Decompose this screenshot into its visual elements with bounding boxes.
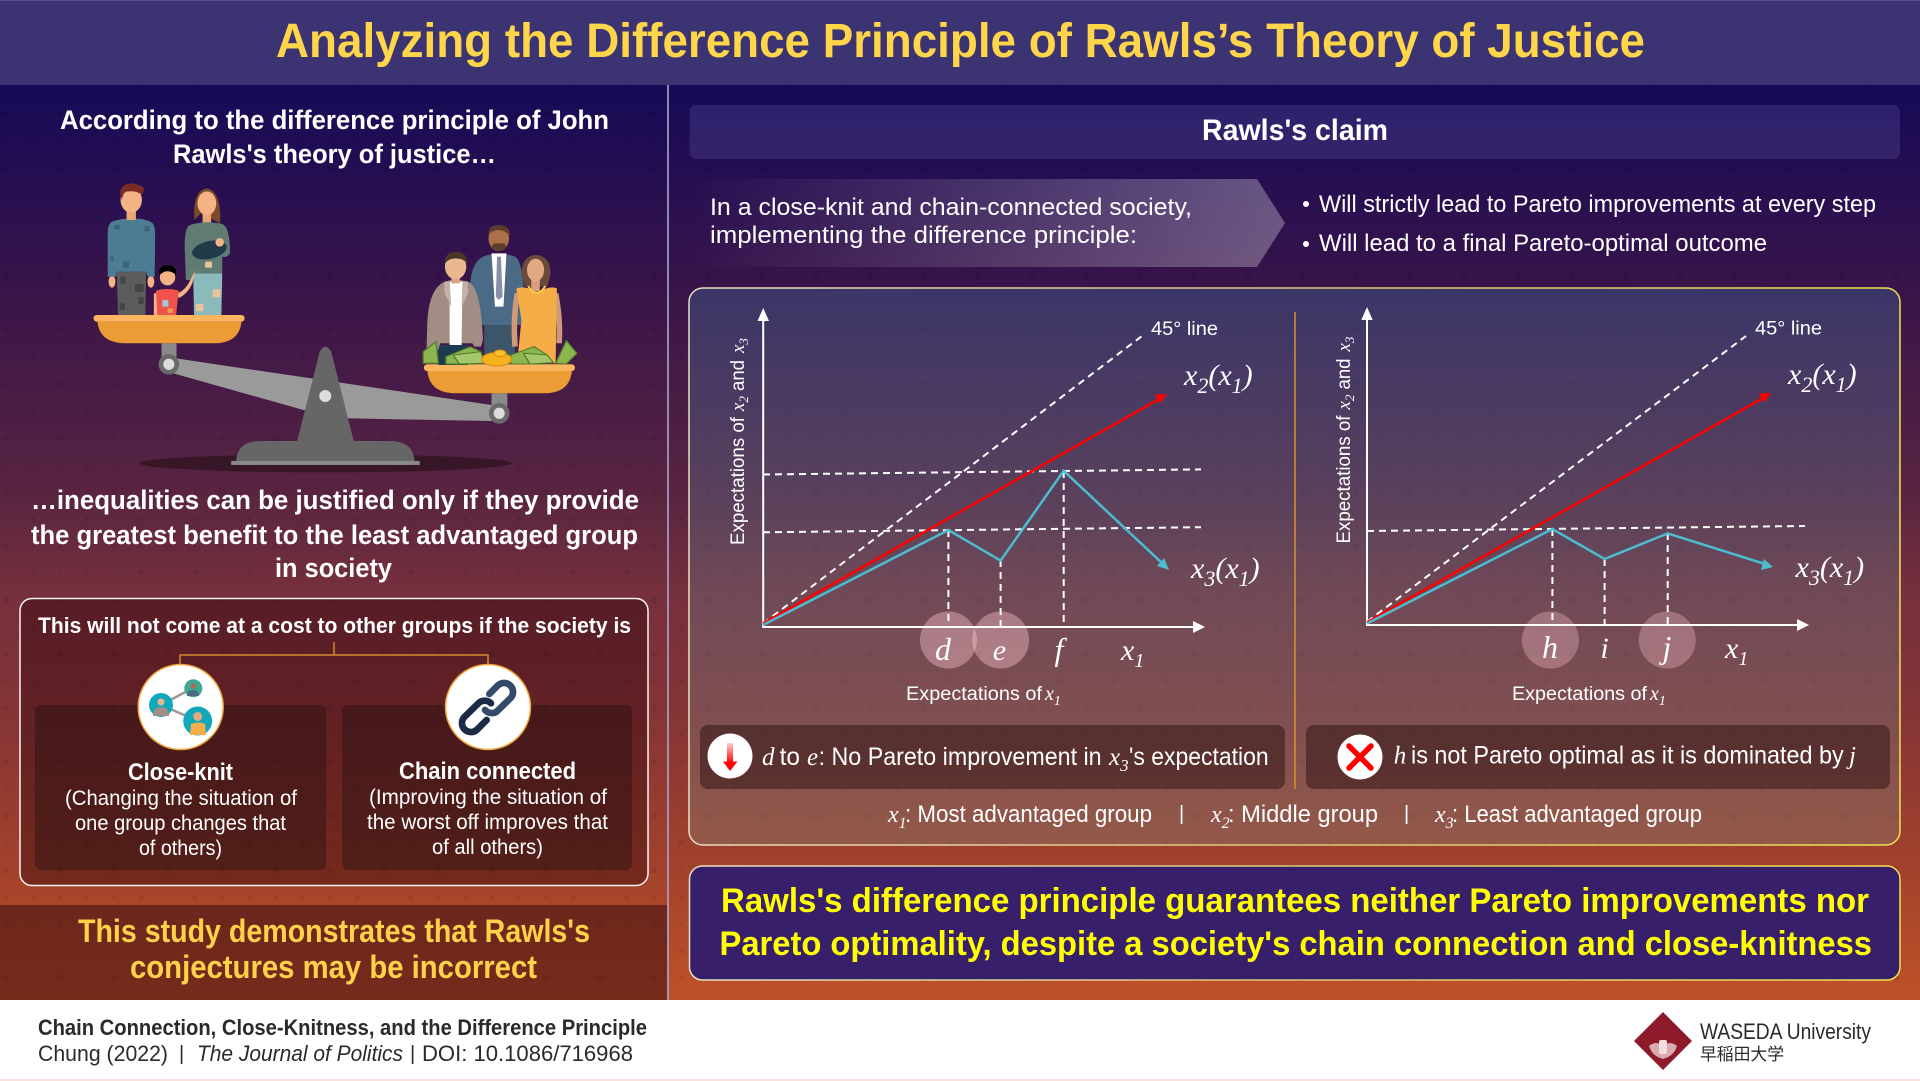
claim bullets: Will strictly lead to Pareto improvements at every step [1319, 191, 1876, 218]
callout: no Pareto improvement: x [1109, 744, 1120, 771]
scale stems [162, 343, 507, 408]
chart labels: i [1600, 632, 1609, 665]
chart labels: 1 [1738, 648, 1748, 670]
chart labels: x [1121, 634, 1134, 667]
chart labels: x [1334, 401, 1355, 410]
citation: DOI: 10.1086/716968 [422, 1041, 633, 1066]
claim bullets: Will lead to a final Pareto-optimal outcome [1319, 230, 1767, 257]
callout: not Pareto optimal: j [1846, 742, 1856, 770]
legend: x [1435, 802, 1446, 828]
left heading: Rawls's theory of justice… [173, 139, 496, 169]
chart labels: Expectations of [728, 416, 749, 545]
close-knit text: (Changing the situation of [65, 787, 297, 810]
dashed guides [763, 336, 1201, 627]
chain connected text: of all others) [432, 836, 543, 859]
panel: charts [0, 288, 1920, 1081]
callout: not Pareto optimal [1306, 725, 1890, 789]
chart labels: (x [1208, 359, 1232, 392]
rich woman [514, 255, 559, 363]
scale fulcrum [231, 347, 420, 465]
chart: right, h-i-j [1334, 307, 1864, 709]
legend: : Most advantaged group [905, 801, 1152, 828]
chart labels: ) [1248, 552, 1260, 585]
chart labels: 3 [1203, 566, 1215, 591]
highlights h and j [1522, 612, 1696, 668]
icon: close-knit network [138, 664, 223, 750]
chart labels: x [1796, 551, 1809, 584]
chart labels: 1 [1239, 566, 1250, 591]
right pan [424, 364, 575, 393]
chart labels: j [1659, 629, 1672, 665]
rich man with suit [470, 225, 525, 363]
left heading [60, 105, 609, 169]
claim bullets [1303, 191, 1876, 257]
citation: Chain Connection, Close-Knitness, and the Difference Principle [38, 1015, 647, 1040]
chart labels: 3 [1342, 336, 1357, 344]
chain connected text: (Improving the situation of [369, 786, 607, 809]
chart labels: 1 [1232, 373, 1243, 398]
Rawls's claim banner [690, 105, 1900, 159]
close-knit text: of others) [139, 837, 222, 860]
legend: | [1179, 803, 1184, 825]
callout: not Pareto optimal: h [1394, 742, 1406, 770]
chart labels: 2 [1342, 394, 1357, 401]
inequalities statement [31, 485, 639, 583]
chart labels: 3 [736, 338, 751, 346]
left heading: According to the difference principle of John [60, 105, 609, 135]
callout: no Pareto improvement: : No Pareto improvement in [819, 743, 1102, 771]
chart: left, d-e-f [0, 307, 1920, 1081]
logo: Waseda University: 早稲田大学 [1700, 1045, 1784, 1064]
legend: 1 [899, 815, 907, 832]
left pan [94, 315, 244, 343]
money pile [423, 341, 577, 366]
cyan curve x3 [763, 471, 1169, 625]
card: chain connected [342, 705, 632, 870]
legend: x [888, 802, 899, 828]
close-knit text: one group changes that [75, 812, 286, 835]
study conclusion band: This study demonstrates that Rawls's [78, 913, 590, 949]
chart labels: ) [1845, 358, 1857, 391]
chart labels: 1 [1843, 565, 1854, 590]
chart labels: x [1650, 683, 1659, 705]
citation: | [179, 1043, 184, 1065]
chart labels: and [728, 360, 749, 391]
chart labels: 2 [736, 396, 751, 403]
chain connected text [367, 758, 608, 859]
close-knit text: Close-knit [128, 759, 233, 786]
callout: no Pareto improvement: 's expectation [1129, 743, 1269, 771]
chart labels: x [1725, 632, 1738, 665]
chain connected text: the worst off improves that [367, 811, 608, 834]
arrow: claim premise: implementing the difference principle: [710, 222, 1137, 249]
study conclusion band [0, 905, 667, 1000]
study conclusion band: conjectures may be incorrect [130, 949, 537, 985]
chart labels: f [1055, 631, 1068, 667]
logo: Waseda University: WASEDA University [1700, 1019, 1871, 1044]
scale beam [173, 358, 492, 421]
panel heading: This will not come at a cost to other groups if the society is [38, 613, 631, 638]
chart labels: 1 [1659, 694, 1666, 709]
panel: society conditions [20, 598, 648, 886]
icon: red cross [1338, 734, 1382, 780]
chart labels: x [728, 345, 749, 353]
red curve x2 [763, 394, 1167, 624]
callout: no Pareto improvement: e [807, 744, 818, 771]
chain connected text: Chain connected [399, 758, 576, 785]
poor child [154, 265, 195, 315]
chart labels: Expectations of [1512, 684, 1648, 705]
legend: x [1211, 802, 1222, 828]
chart labels: (x [1812, 358, 1836, 391]
chart labels: 3 [1808, 565, 1820, 590]
chart labels: 45° line [1755, 318, 1822, 340]
close-knit text [65, 759, 297, 860]
chart labels: d [935, 631, 952, 667]
callout: no Pareto improvement [700, 725, 1285, 789]
title band [0, 0, 1920, 85]
citation: | [410, 1043, 415, 1065]
inequalities statement: …inequalities can be justified only if they provide [31, 485, 639, 515]
arrow: claim premise: In a close-knit and chain-connected society, [710, 194, 1192, 221]
chart labels: ) [1241, 359, 1253, 392]
chart labels [1334, 318, 1864, 709]
chart labels: 2 [1197, 373, 1208, 398]
chart labels: ) [1852, 551, 1864, 584]
legend: | [1404, 803, 1409, 825]
divider between charts [1294, 312, 1296, 789]
chart labels: (x [1215, 552, 1239, 585]
chart labels: (x [1820, 551, 1844, 584]
inequalities statement: in society [275, 553, 392, 583]
cyan curve x3 [1367, 529, 1773, 624]
chart labels: h [1542, 629, 1558, 665]
callout: no Pareto improvement: 3 [1119, 756, 1129, 775]
icon: red down arrow [708, 734, 752, 778]
illustration: balance scale with families [94, 183, 577, 472]
Rawls's claim banner: Rawls's claim [1202, 114, 1388, 147]
chart labels: x [1184, 359, 1197, 392]
chart labels: 1 [1134, 650, 1144, 672]
legend: 3 [1445, 815, 1454, 832]
chart labels: 2 [1801, 372, 1812, 397]
poor mother with baby [185, 188, 230, 315]
red curve x2 [1367, 393, 1771, 622]
dashed guides [1367, 336, 1805, 625]
legend [887, 801, 1702, 832]
chart labels: x [1334, 343, 1355, 352]
chart labels [728, 319, 1260, 709]
chart labels: Expectations of [1334, 415, 1355, 544]
axes [763, 318, 1195, 627]
icon: chain link [446, 664, 530, 750]
callout: no Pareto improvement: to [780, 743, 800, 771]
citation: The Journal of Politics [197, 1041, 403, 1066]
scale shadow [139, 454, 512, 472]
conclusion box: Pareto optimality, despite a society's chain connection and close-knitness [720, 925, 1872, 963]
citation: Chung (2022) [38, 1041, 168, 1066]
rich man with jacket [427, 252, 483, 365]
chart labels: 45° line [1151, 319, 1218, 340]
conclusion box [690, 866, 1900, 980]
title band: Analyzing the Difference Principle of Rawls’s Theory of Justice [276, 15, 1645, 68]
chart labels: x [1788, 358, 1801, 391]
callout: no Pareto improvement: d [762, 744, 775, 771]
citation [38, 1015, 647, 1066]
legend: : Middle group [1228, 801, 1378, 828]
chart labels: 1 [1054, 694, 1061, 709]
chart labels: Expectations of [906, 684, 1043, 705]
arrow: claim premise [690, 179, 1285, 267]
chart labels: x [1045, 683, 1054, 705]
chart labels: x [728, 403, 749, 411]
footer [0, 1000, 1920, 1081]
axes [1367, 317, 1799, 625]
inequalities statement: the greatest benefit to the least advantaged group [31, 520, 638, 550]
chart labels: x [1191, 552, 1204, 585]
conclusion box: Rawls's difference principle guarantees neither Pareto improvements nor [721, 882, 1869, 920]
callout: not Pareto optimal: is not Pareto optimal as it is dominated by [1411, 742, 1844, 770]
legend: 2 [1222, 815, 1230, 832]
connector [180, 642, 488, 665]
legend: : Least advantaged group [1452, 801, 1702, 828]
chart labels: 1 [1836, 372, 1847, 397]
hinges [159, 354, 509, 424]
chart labels: e [993, 634, 1006, 667]
logo: Waseda University [1634, 1012, 1871, 1070]
highlights d and e [920, 612, 1029, 668]
poor father [108, 183, 155, 315]
card: close-knit [35, 705, 326, 870]
column divider [667, 85, 669, 1000]
chart labels: and [1334, 358, 1355, 390]
